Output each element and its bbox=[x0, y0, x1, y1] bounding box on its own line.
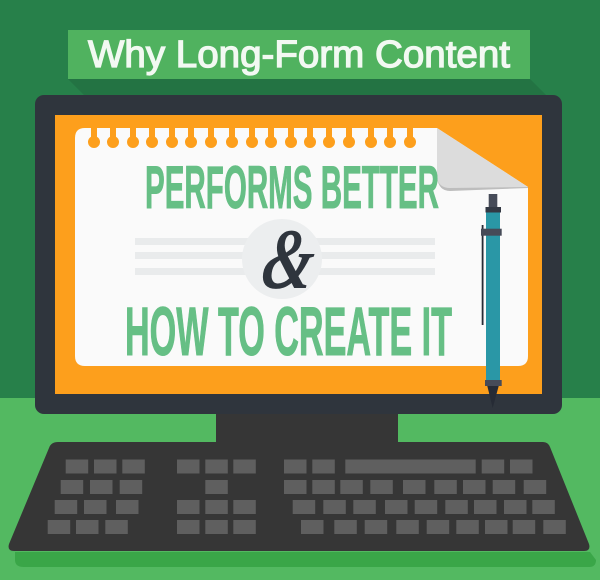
background: desk bbox=[0, 398, 600, 580]
monitor stand bbox=[216, 414, 398, 444]
keyboard keys bbox=[48, 466, 566, 527]
notepad page bbox=[75, 128, 528, 366]
icon: pen bbox=[481, 194, 502, 408]
ampersand badge bbox=[242, 211, 322, 307]
page fold shadow bbox=[437, 178, 528, 191]
keyboard shadow bbox=[15, 552, 596, 567]
keyboard bbox=[9, 442, 589, 551]
title banner shadow bbox=[68, 79, 546, 95]
monitor bbox=[35, 95, 562, 414]
ampersand: & bbox=[257, 211, 321, 307]
title text: Why Long-Form Content bbox=[88, 34, 510, 76]
background: wall bbox=[0, 0, 600, 398]
spiral holes bbox=[91, 134, 413, 142]
divider lines bbox=[135, 238, 435, 275]
page fold bbox=[437, 128, 528, 188]
title banner bbox=[68, 30, 530, 79]
monitor screen bbox=[55, 115, 542, 394]
